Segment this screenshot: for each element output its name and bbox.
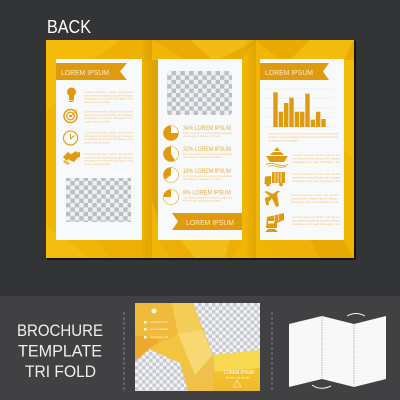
pie stat 8% (164, 190, 232, 204)
heading: brochure template tri fold (17, 321, 103, 381)
panel: left (56, 59, 142, 240)
pie stat 32%: Lorem ipsum dolor sit amet consectetur adipiscing (183, 152, 232, 156)
pie stat 32%: 32% LOREM IPSUM (183, 147, 231, 153)
image placeholder (66, 178, 131, 222)
fold shading (246, 40, 256, 258)
dashed divider (123, 312, 125, 390)
brochure shadow (47, 41, 356, 260)
pie stat 8%: elit integer tristique orci sed (183, 198, 221, 202)
arrow: bottom fold (312, 385, 331, 388)
dashed divider (271, 312, 273, 390)
pie stat 8%: 8% LOREM IPSUM (183, 190, 231, 196)
icon: truck (264, 172, 285, 186)
ribbon heading: LOREM IPSUM (265, 68, 313, 77)
text block: consectetur adipiscing elit integer (84, 113, 133, 117)
pie stat 32% (163, 146, 232, 162)
arrow: top fold (347, 314, 365, 316)
text block: tristique orci sed tristique nisi (292, 179, 340, 183)
chart caption: tristique orci sed tristique nisi cursus sed convallis amet (268, 135, 338, 139)
text block: Lorem ipsum dolor sit amet (291, 193, 338, 197)
text block: consectetur adipiscing elit integer (292, 156, 340, 160)
pie stat 34%: 34% LOREM IPSUM (183, 126, 231, 132)
text block: tristique orci sed tristique nisi (292, 160, 340, 164)
panel: right (260, 59, 344, 240)
preview contact text (144, 308, 169, 339)
ribbon heading (56, 63, 127, 80)
icon: airplane (264, 191, 280, 207)
text block: consectetur adipiscing elit integer (292, 176, 340, 180)
polygon facets (135, 303, 260, 391)
text block: cursus sed convallis (84, 100, 110, 104)
text block (84, 110, 133, 123)
pie stat 18% (164, 168, 232, 182)
icon: handshake (63, 151, 80, 165)
preview title (224, 370, 254, 387)
fold shading (142, 40, 152, 258)
icon: light bulb (67, 88, 76, 102)
image placeholder right (193, 303, 260, 355)
text block: consectetur adipiscing elit integer (84, 155, 133, 159)
front brochure preview (135, 303, 260, 391)
text block: cursus sed convallis (84, 140, 110, 144)
text block: consectetur adipiscing elit integer (84, 134, 133, 138)
ribbon heading (260, 63, 329, 80)
pie stat 18%: Lorem ipsum dolor sit amet consectetur adipiscing (183, 174, 232, 178)
icon: target (64, 110, 77, 122)
text block: cursus sed convallis (84, 119, 110, 123)
image placeholder (167, 71, 232, 115)
text block: Lorem ipsum dolor sit amet (292, 215, 340, 219)
heading: brochure template tri fold: TRI FOLD (25, 362, 96, 381)
text block: Lorem ipsum dolor sit amet (84, 90, 133, 94)
brochure back spread (46, 40, 356, 260)
ribbon footer (172, 213, 242, 230)
text block: cursus sed convallis (84, 162, 110, 166)
heading: brochure template tri fold: TEMPLATE (18, 342, 102, 360)
pie stat 18%: 18% LOREM IPSUM (183, 169, 231, 175)
pie stat 34% (164, 126, 232, 140)
text block: tristique orci sed tristique nisi (291, 200, 338, 204)
bar chart (265, 89, 333, 127)
text block: consectetur adipiscing elit integer (291, 196, 338, 200)
text block: Lorem ipsum dolor sit amet (84, 110, 133, 114)
chart caption: Lorem ipsum dolor sit amet consectetur adipiscing elit integer (268, 132, 338, 136)
pie stat 32%: elit integer tristique orci sed (183, 155, 221, 159)
preview contact text: website url (150, 336, 169, 339)
text block: tristique orci sed tristique nisi (84, 116, 133, 120)
text block (84, 130, 133, 144)
yellow polygon background (46, 40, 354, 258)
text block: tristique orci sed tristique nisi (84, 137, 133, 141)
pie stat 18%: elit integer tristique orci sed (183, 177, 221, 181)
text block (84, 152, 133, 166)
image placeholder left (135, 349, 188, 391)
text block (84, 90, 133, 104)
text block (292, 172, 340, 183)
pie stat 8%: Lorem ipsum dolor sit amet consectetur adipiscing (183, 196, 232, 200)
icon: clock (64, 131, 78, 145)
text block (292, 153, 340, 164)
ribbon footer: LOREM IPSUM (186, 218, 234, 227)
text block: consectetur adipiscing elit integer (84, 93, 133, 97)
ribbon heading: LOREM IPSUM (61, 68, 109, 77)
bottom band (0, 296, 400, 400)
text block: tristique orci sed tristique nisi (84, 97, 133, 101)
pie stat 34%: elit integer tristique orci sed (183, 134, 221, 138)
pie stat 34%: Lorem ipsum dolor sit amet consectetur adipiscing (183, 131, 232, 135)
preview contact text: contact info (150, 321, 169, 324)
text block (292, 215, 340, 226)
icon: ship (266, 147, 288, 167)
title: back: BACK (47, 17, 91, 37)
text block: tristique orci sed tristique nisi (84, 159, 133, 163)
text block: Lorem ipsum dolor sit amet (84, 130, 133, 134)
preview title: dolor sit amet (226, 376, 250, 380)
preview contact text: email address (150, 328, 169, 331)
chart caption (268, 132, 338, 142)
text block: consectetur adipiscing elit integer (292, 218, 340, 222)
text block: tristique orci sed tristique nisi (292, 222, 340, 226)
text block: Lorem ipsum dolor sit amet (292, 153, 340, 157)
chart caption: consectetur integer (268, 138, 298, 142)
tri-fold diagram (289, 314, 386, 388)
text block: Lorem ipsum dolor sit amet (84, 152, 133, 156)
panel: middle (158, 59, 242, 240)
text block (291, 193, 338, 204)
icon: train (265, 213, 284, 232)
text block: Lorem ipsum dolor sit amet (292, 172, 340, 176)
heading: brochure template tri fold: BROCHURE (17, 321, 103, 340)
preview title: LOREM IPSUM (224, 370, 254, 376)
dark background (0, 0, 400, 296)
